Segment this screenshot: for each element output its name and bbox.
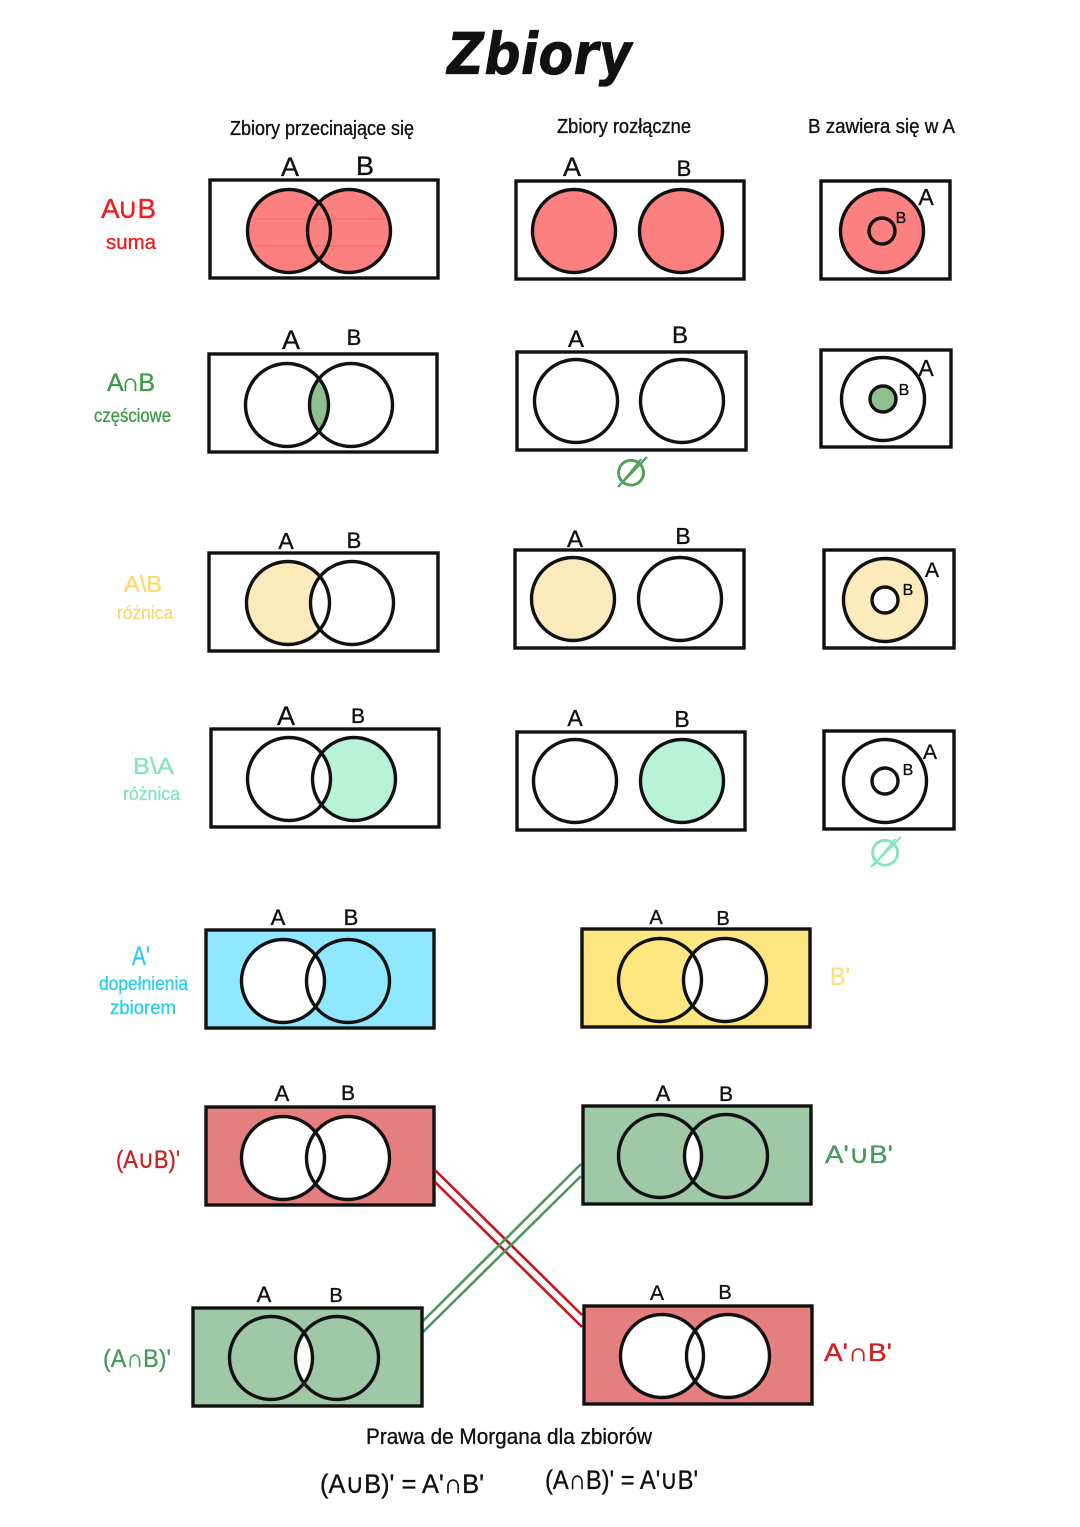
empty set symbol, green: ∅ bbox=[614, 451, 648, 495]
venn: union, intersecting bbox=[210, 151, 438, 278]
label: B minus A bbox=[123, 753, 181, 804]
label: complement of A: A' bbox=[132, 941, 150, 971]
venn: B minus A, disjoint bbox=[517, 705, 745, 830]
label: intersection: A ∩ B bbox=[107, 369, 155, 397]
empty set symbol, mint: ∅ bbox=[868, 831, 902, 875]
venn: complement of B: B bbox=[716, 908, 730, 930]
label: A minus B: A\B bbox=[124, 571, 162, 597]
label: intersection: częściowe bbox=[94, 406, 171, 427]
venn: union of complements: B bbox=[719, 1083, 733, 1106]
venn: complement of A bbox=[206, 905, 434, 1028]
heading: De Morgan laws: Prawa de Morgana dla zbiorów bbox=[366, 1424, 652, 1449]
venn: A minus B, subset: B bbox=[903, 582, 913, 599]
venn: complement of union: A bbox=[275, 1081, 290, 1106]
label: union: A ∪ B bbox=[101, 193, 156, 224]
venn: intersection, intersecting bbox=[209, 325, 437, 452]
venn: B minus A, subset: B bbox=[903, 762, 913, 779]
venn: intersection, subset: A bbox=[918, 355, 934, 381]
venn: intersection, intersecting: B bbox=[347, 325, 361, 350]
venn: intersection, disjoint bbox=[517, 322, 746, 450]
venn: B minus A, intersecting: B bbox=[351, 705, 365, 728]
formula: first De Morgan law: (A∪B)' = A'∩B' bbox=[320, 1469, 484, 1499]
label: union: suma bbox=[106, 232, 157, 254]
venn: intersection of complements: A bbox=[650, 1282, 664, 1305]
venn: union, subset: A bbox=[918, 184, 934, 210]
venn: complement of union bbox=[206, 1081, 434, 1205]
venn: A minus B, intersecting: A bbox=[278, 528, 294, 554]
connector: red double line bbox=[435, 1170, 582, 1327]
venn: B minus A, subset bbox=[824, 731, 954, 829]
venn: union of complements: A bbox=[656, 1081, 671, 1106]
venn: intersection of complements bbox=[584, 1282, 812, 1404]
venn: complement of A: A bbox=[271, 905, 286, 930]
venn: intersection, subset: B bbox=[899, 382, 909, 399]
label: union of complements: A'∪B' bbox=[825, 1141, 893, 1169]
label: complement of union: (A∪B)' bbox=[116, 1146, 180, 1174]
venn: B minus A, intersecting: A bbox=[277, 701, 295, 731]
label: B minus A: B\A bbox=[133, 753, 175, 779]
venn: union, disjoint: A bbox=[563, 152, 581, 182]
venn: union of complements bbox=[583, 1081, 811, 1204]
venn: complement of B bbox=[582, 907, 810, 1027]
venn: A minus B, disjoint: A bbox=[567, 526, 583, 553]
venn: intersection, intersecting: A bbox=[282, 325, 300, 355]
column heading: disjoint sets: Zbiory rozłączne bbox=[557, 116, 691, 138]
venn: complement of intersection: B bbox=[329, 1285, 343, 1307]
column heading: B contained in A: B zawiera się w A bbox=[808, 116, 956, 138]
label: A minus B bbox=[117, 571, 174, 623]
label: complement of A: zbiorem bbox=[110, 998, 176, 1019]
venn: intersection, disjoint: A bbox=[568, 326, 584, 353]
label: complement of A: dopełnienia bbox=[99, 974, 188, 995]
label: complement of intersection: (A∩B)' bbox=[103, 1345, 171, 1373]
venn: complement of intersection bbox=[193, 1282, 422, 1406]
label: intersection of complements: A'∩B' bbox=[824, 1339, 892, 1367]
venn: union, intersecting: A bbox=[281, 152, 299, 182]
column heading: intersecting sets: Zbiory przecinające się bbox=[230, 118, 414, 140]
formula: second De Morgan law: (A∩B)' = A'∪B' bbox=[545, 1465, 698, 1495]
venn: A minus B, disjoint bbox=[515, 523, 744, 648]
title: Zbiory bbox=[445, 20, 634, 88]
venn: A minus B, disjoint: B bbox=[675, 523, 691, 549]
venn: B minus A, disjoint: B bbox=[674, 706, 690, 732]
venn: union, subset bbox=[821, 181, 950, 279]
venn: intersection, disjoint: B bbox=[672, 322, 688, 349]
label: union bbox=[101, 193, 157, 254]
venn: union, disjoint: B bbox=[677, 156, 691, 181]
label: A minus B: różnica bbox=[117, 603, 174, 623]
label: complement of A bbox=[99, 941, 188, 1019]
venn: A minus B, intersecting bbox=[209, 528, 438, 651]
venn: B minus A, subset: A bbox=[923, 741, 937, 764]
venn: B minus A, intersecting bbox=[211, 701, 439, 827]
venn: intersection, subset bbox=[821, 350, 951, 447]
venn: A minus B, subset bbox=[824, 550, 954, 648]
venn: union, subset: B bbox=[896, 210, 906, 227]
venn: complement of union: B bbox=[341, 1082, 355, 1105]
venn: A minus B, intersecting: B bbox=[347, 528, 361, 553]
label: complement of B: B' bbox=[830, 963, 850, 991]
label: B minus A: różnica bbox=[123, 784, 181, 804]
venn: complement of A: B bbox=[344, 905, 358, 930]
venn: B minus A, disjoint: A bbox=[567, 705, 583, 731]
connector: green double line bbox=[423, 1164, 581, 1332]
venn: complement of intersection: A bbox=[257, 1282, 272, 1307]
venn: union, intersecting: B bbox=[356, 151, 374, 181]
venn: A minus B, subset: A bbox=[925, 559, 939, 582]
venn: complement of B: A bbox=[649, 907, 663, 929]
venn: union, disjoint bbox=[516, 152, 744, 279]
venn: intersection of complements: B bbox=[718, 1282, 732, 1304]
label: intersection bbox=[94, 369, 171, 427]
